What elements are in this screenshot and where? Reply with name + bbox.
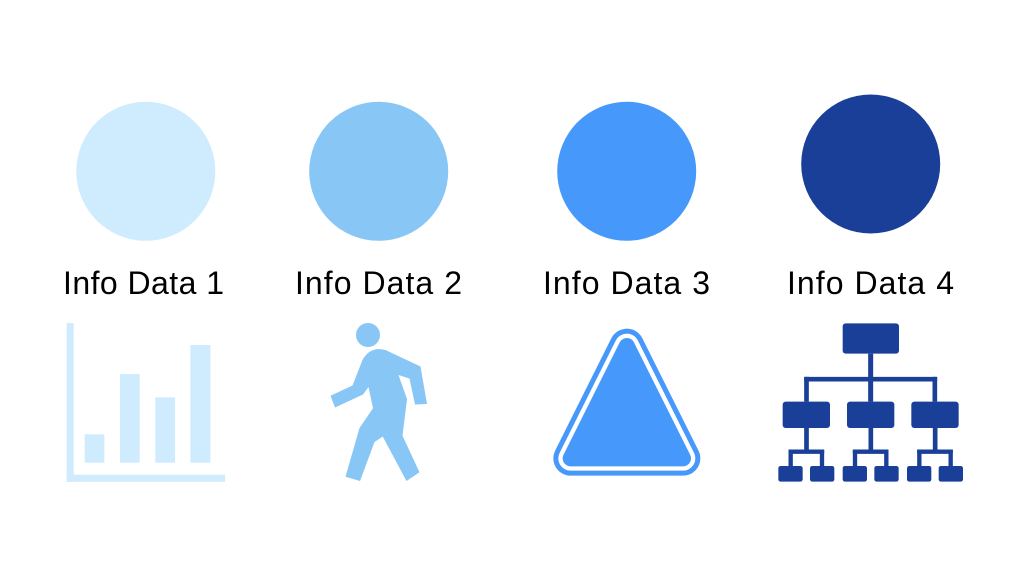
label 4: Info Data 4	[787, 265, 954, 301]
icon: rounded triangle	[571, 346, 683, 458]
panel: info data 1	[63, 102, 225, 482]
circle 4	[801, 94, 940, 234]
circle 3	[557, 102, 696, 241]
label 3: Info Data 3	[543, 265, 710, 301]
label 2: Info Data 2	[295, 265, 462, 301]
icon: org chart	[778, 323, 963, 482]
panel: info data 4	[778, 94, 963, 482]
icon: bar chart	[67, 323, 225, 482]
panel: info data 3	[543, 102, 710, 458]
circle 2	[309, 102, 448, 241]
circle 1	[76, 102, 215, 241]
icon: walking person	[330, 323, 427, 481]
label 1: Info Data 1	[63, 265, 224, 301]
panel: info data 2	[295, 102, 462, 481]
